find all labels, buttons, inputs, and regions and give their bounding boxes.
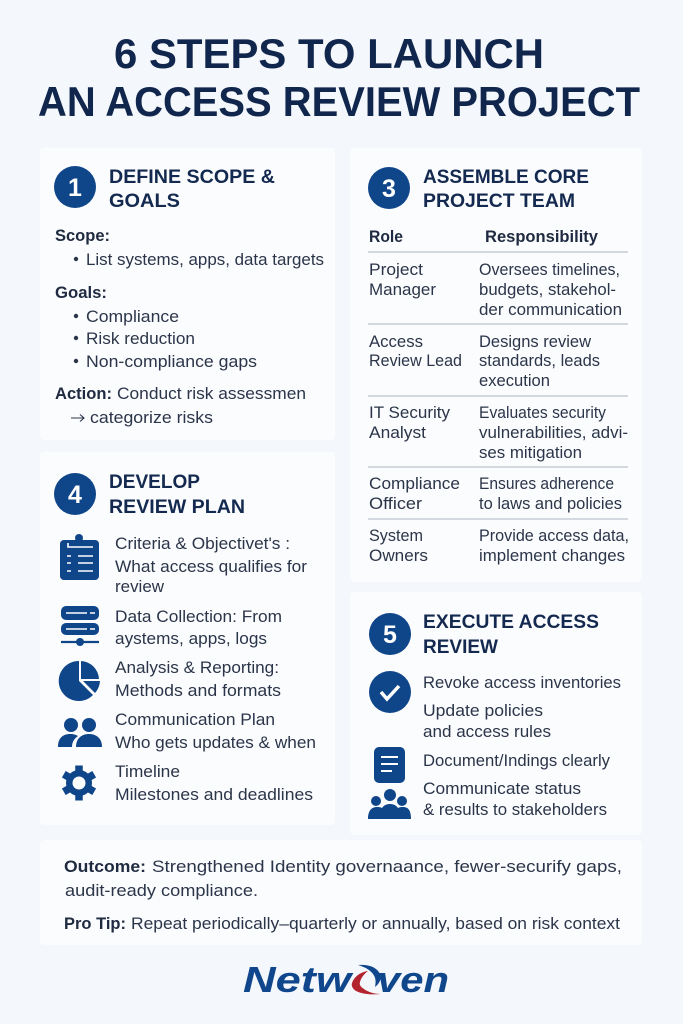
panel: step 3 assemble core project team bbox=[350, 148, 642, 582]
logo: Netwoven: Netw bbox=[243, 959, 354, 1000]
panel: step 4 develop review plan bbox=[40, 452, 335, 825]
team table: Oversees timelines, bbox=[479, 260, 620, 279]
step 4 heading bbox=[109, 471, 245, 518]
team table: Review Lead bbox=[369, 351, 462, 370]
communicate text: & results to stakeholders bbox=[423, 800, 607, 819]
goals block: Compliance bbox=[86, 307, 179, 326]
team table: System bbox=[369, 526, 423, 545]
action block: categorize risks bbox=[90, 408, 213, 427]
outcome text: Outcome: bbox=[64, 858, 146, 876]
team table: Designs review bbox=[479, 332, 592, 351]
outcome text: Strengthened Identity governaance, fewer-securify gaps, bbox=[152, 857, 622, 876]
data collection text: Data Collection: From bbox=[115, 607, 282, 626]
step 1 heading: GOALS bbox=[109, 190, 180, 212]
step 5 badge bbox=[369, 613, 411, 655]
team table: Role bbox=[369, 228, 403, 246]
step 5 heading: EXECUTE ACCESS bbox=[423, 611, 599, 633]
team table: Ensures adherence bbox=[479, 474, 614, 493]
step 3 heading bbox=[423, 166, 589, 212]
timeline text: Timeline bbox=[115, 762, 180, 781]
revoke and update text: and access rules bbox=[423, 722, 551, 741]
action block bbox=[55, 384, 306, 427]
revoke and update text bbox=[423, 673, 621, 741]
title: 6 STEPS TO LAUNCH bbox=[114, 30, 544, 77]
team table: budgets, stakehol- bbox=[479, 280, 616, 299]
step 5 badge: 5 bbox=[383, 621, 397, 649]
data collection text: aystems, apps, logs bbox=[115, 629, 267, 648]
criteria text: review bbox=[115, 577, 165, 596]
scope block: Scope: bbox=[55, 227, 110, 245]
criteria text: What access qualifies for bbox=[115, 557, 307, 576]
communication text bbox=[115, 710, 316, 752]
team table: Evaluates security bbox=[479, 403, 606, 422]
team table: Officer bbox=[369, 494, 422, 513]
icon: clipboard checklist bbox=[60, 534, 99, 580]
team table: Project bbox=[369, 260, 423, 279]
icon: document bbox=[374, 747, 405, 783]
logo: Netwoven bbox=[243, 959, 449, 1000]
analysis text bbox=[115, 658, 281, 700]
team table: Access bbox=[369, 332, 423, 351]
team table: Manager bbox=[369, 280, 436, 299]
icon: check circle bbox=[369, 671, 411, 713]
analysis text: Methods and formats bbox=[115, 681, 281, 700]
analysis text: Analysis & Reporting: bbox=[115, 658, 279, 677]
step 1 heading bbox=[109, 166, 275, 212]
step 5 heading bbox=[423, 611, 599, 658]
scope block: List systems, apps, data targets bbox=[86, 250, 324, 269]
step 3 badge: 3 bbox=[382, 175, 396, 203]
communication text: Who gets updates & when bbox=[115, 733, 316, 752]
pro tip text: Pro Tip: bbox=[64, 915, 126, 933]
step 1 heading: DEFINE SCOPE & bbox=[109, 166, 275, 188]
step 3 badge bbox=[368, 167, 410, 209]
outcome text: audit-ready compliance. bbox=[65, 881, 258, 900]
title: AN ACCESS REVIEW PROJECT bbox=[38, 78, 640, 125]
team table: Compliance bbox=[369, 474, 460, 493]
goals block: Risk reduction bbox=[86, 329, 195, 348]
step 5 heading: REVIEW bbox=[423, 636, 499, 658]
goals block: Goals: bbox=[55, 284, 107, 302]
goals block: Non-compliance gaps bbox=[86, 352, 257, 371]
step 3 heading: ASSEMBLE CORE bbox=[423, 166, 589, 188]
panel: step 5 execute access review bbox=[350, 592, 642, 835]
step 4 heading: REVIEW PLAN bbox=[109, 496, 245, 518]
team table bbox=[368, 228, 629, 565]
scope block bbox=[55, 227, 324, 269]
criteria text: Criteria & Objectivet's : bbox=[115, 534, 290, 553]
logo swoosh bbox=[352, 965, 381, 994]
revoke and update text: Revoke access inventories bbox=[423, 673, 621, 692]
timeline text bbox=[115, 762, 313, 804]
panel: step 1 define scope and goals bbox=[40, 148, 335, 440]
team table: to laws and policies bbox=[479, 494, 622, 513]
team table: implement changes bbox=[479, 546, 625, 565]
team table: Provide access data, bbox=[479, 526, 629, 545]
team table: Analyst bbox=[369, 423, 426, 442]
team table: vulnerabilities, advi- bbox=[479, 423, 628, 442]
team table: IT Security bbox=[369, 403, 450, 422]
step 1 badge bbox=[54, 166, 96, 208]
communicate text bbox=[423, 779, 607, 819]
step 4 heading: DEVELOP bbox=[109, 471, 200, 493]
data collection text bbox=[115, 607, 282, 648]
icon: gear bbox=[64, 766, 94, 800]
icon: two people bbox=[58, 718, 102, 747]
team table: ses mitigation bbox=[479, 443, 582, 462]
title bbox=[38, 30, 640, 125]
logo: Netwoven: ven bbox=[377, 959, 449, 1000]
step 3 heading: PROJECT TEAM bbox=[423, 190, 575, 212]
timeline text: Milestones and deadlines bbox=[115, 785, 313, 804]
icon: server stack bbox=[61, 606, 99, 646]
outcome text bbox=[64, 857, 622, 900]
goals block bbox=[55, 284, 257, 371]
team table: standards, leads bbox=[479, 351, 600, 370]
team table: execution bbox=[479, 371, 550, 390]
action block: Action: bbox=[55, 385, 112, 403]
revoke and update text: Update policies bbox=[423, 701, 543, 720]
team table: Responsibility bbox=[485, 228, 599, 246]
step 4 badge bbox=[54, 473, 96, 515]
panel: outcome and pro tip bbox=[40, 840, 642, 945]
pro tip text: Repeat periodically–quarterly or annually, based on risk context bbox=[131, 914, 620, 933]
step 4 badge: 4 bbox=[68, 481, 82, 509]
communication text: Communication Plan bbox=[115, 710, 275, 729]
team table: der communication bbox=[479, 300, 622, 319]
document text: Document/Indings clearly bbox=[423, 751, 610, 770]
team table: Owners bbox=[369, 546, 428, 565]
icon: stakeholder group bbox=[368, 789, 411, 819]
criteria text bbox=[115, 534, 307, 596]
communicate text: Communicate status bbox=[423, 779, 581, 798]
step 1 badge: 1 bbox=[68, 174, 82, 202]
icon: pie chart bbox=[59, 661, 100, 701]
action block: Conduct risk assessmen bbox=[117, 384, 306, 403]
